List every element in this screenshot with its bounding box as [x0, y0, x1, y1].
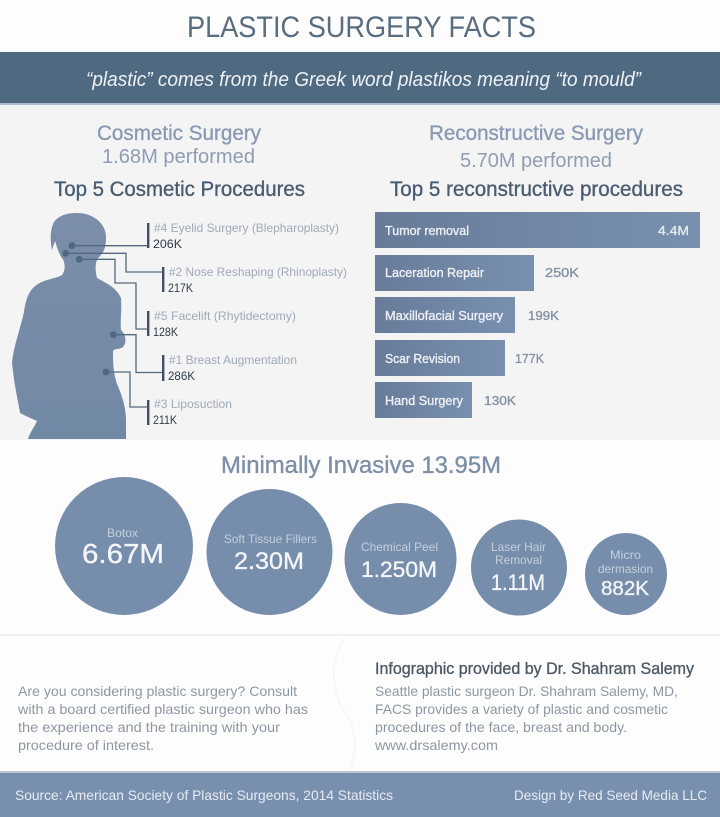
heading: cosmetic surgery: 1.68M performed: [102, 146, 255, 168]
icon: female body silhouette: [12, 213, 126, 439]
circle: botox: Botox: [107, 526, 138, 540]
bar: scar revision: Scar Revision: [385, 351, 460, 366]
text block: infographic provider: Seattle plastic surgeon Dr. Shahram Salemy, MD,: [375, 683, 678, 699]
banner: Greek word origin: “plastic” comes from the Greek word plastikos meaning “to mould”: [86, 69, 642, 91]
panel: surgery background: [0, 105, 720, 440]
callout: liposuction: [103, 369, 232, 427]
circle: microdermabrasion: Micro: [610, 548, 641, 562]
circle: botox: [55, 477, 193, 615]
circle: laser hair removal: [471, 520, 567, 616]
callout: facelift: #5 Facelift (Rhytidectomy): [154, 309, 296, 323]
bar: laceration repair: 250K: [545, 265, 579, 280]
panel: minimally invasive: [55, 452, 667, 616]
bar chart: reconstructive procedures: [375, 212, 700, 418]
banner: Greek word origin: [0, 52, 720, 105]
callout: nose reshaping: 217K: [168, 281, 193, 295]
text block: consult a surgeon: [17, 683, 308, 753]
bar: scar revision: 177K: [515, 351, 544, 366]
circle: laser hair removal: Removal: [495, 553, 542, 567]
bar: tumor removal: Tumor removal: [385, 223, 469, 238]
text block: infographic provider: Infographic provided by Dr. Shahram Salemy: [375, 659, 694, 678]
text block: consult a surgeon: with a board certified plastic surgeon who has: [17, 701, 308, 717]
callout: facelift: 128K: [153, 325, 178, 339]
circle: soft tissue fillers: Soft Tissue Fillers: [224, 532, 317, 546]
callout: breast augmentation: #1 Breast Augmentation: [169, 353, 297, 367]
circle: microdermabrasion: dermasion: [598, 562, 653, 576]
text block: consult a surgeon: the experience and the training with your: [18, 719, 280, 735]
panel: reconstructive surgery: [375, 122, 700, 418]
text block: consult a surgeon: procedure of interest.: [18, 737, 154, 753]
bar: hand surgery: [375, 382, 516, 418]
heading: top 5 reconstructive procedures: Top 5 reconstructive procedures: [390, 178, 683, 201]
heading: minimally invasive: Minimally Invasive 13.95M: [221, 452, 501, 479]
circle: laser hair removal: 1.11M: [491, 570, 545, 595]
circle: soft tissue fillers: 2.30M: [234, 548, 304, 575]
bar: maxillofacial surgery: Maxillofacial Surgery: [385, 308, 503, 323]
circle: botox: 6.67M: [82, 538, 164, 569]
heading: reconstructive surgery: 5.70M performed: [460, 150, 612, 172]
circle: chemical peel: 1.250M: [361, 557, 437, 582]
callout: liposuction: #3 Liposuction: [154, 397, 232, 411]
callout: nose reshaping: [62, 250, 347, 295]
text block: infographic provider: [374, 659, 694, 753]
heading: reconstructive surgery: [429, 122, 643, 172]
bar: tumor removal: 4.4M: [658, 223, 689, 238]
callout: eyelid surgery: #4 Eyelid Surgery (Blepharoplasty): [154, 221, 339, 235]
bar: hand surgery: 130K: [484, 393, 516, 408]
heading: top 5 cosmetic procedures: Top 5 Cosmetic Procedures: [54, 178, 305, 201]
circle: laser hair removal: Laser Hair: [491, 540, 546, 554]
bar: laceration repair: Laceration Repair: [385, 265, 485, 280]
circle: chemical peel: Chemical Peel: [361, 540, 438, 554]
bar: scar revision: [375, 340, 544, 376]
bar: maxillofacial surgery: 199K: [528, 308, 559, 323]
circle: chemical peel: [344, 503, 456, 615]
text block: infographic provider: www.drsalemy.com: [374, 737, 498, 753]
bar: tumor removal: [375, 212, 700, 248]
callout: facelift: [76, 256, 296, 339]
title: PLASTIC SURGERY FACTS: [187, 11, 536, 44]
heading: cosmetic surgery: Cosmetic Surgery: [97, 122, 261, 145]
callout: eyelid surgery: 206K: [153, 237, 182, 251]
text block: infographic provider: FACS provides a variety of plastic and cosmetic: [375, 701, 668, 717]
callout: breast augmentation: 286K: [168, 369, 195, 383]
circle: microdermabrasion: 882K: [601, 578, 650, 600]
panel: cosmetic surgery: [12, 122, 347, 439]
footer: Source: American Society of Plastic Surgeons, 2014 Statistics: [15, 787, 393, 803]
circle: soft tissue fillers: [206, 489, 332, 615]
callout: breast augmentation: [110, 331, 297, 383]
bar: laceration repair: [375, 255, 579, 291]
heading: cosmetic surgery: [97, 122, 261, 168]
callout: eyelid surgery: [69, 221, 339, 251]
bar: maxillofacial surgery: [375, 297, 559, 333]
footer: [0, 771, 720, 817]
footer: Design by Red Seed Media LLC: [514, 787, 707, 803]
callout: liposuction: 211K: [153, 413, 177, 427]
callout: nose reshaping: #2 Nose Reshaping (Rhinoplasty): [169, 265, 347, 279]
text block: infographic provider: procedures of the face, breast and body.: [375, 719, 627, 735]
circle: microdermabrasion: [585, 533, 667, 615]
text block: consult a surgeon: Are you considering plastic surgery? Consult: [18, 683, 297, 699]
bar: hand surgery: Hand Surgery: [385, 393, 463, 408]
heading: reconstructive surgery: Reconstructive Surgery: [429, 122, 643, 145]
